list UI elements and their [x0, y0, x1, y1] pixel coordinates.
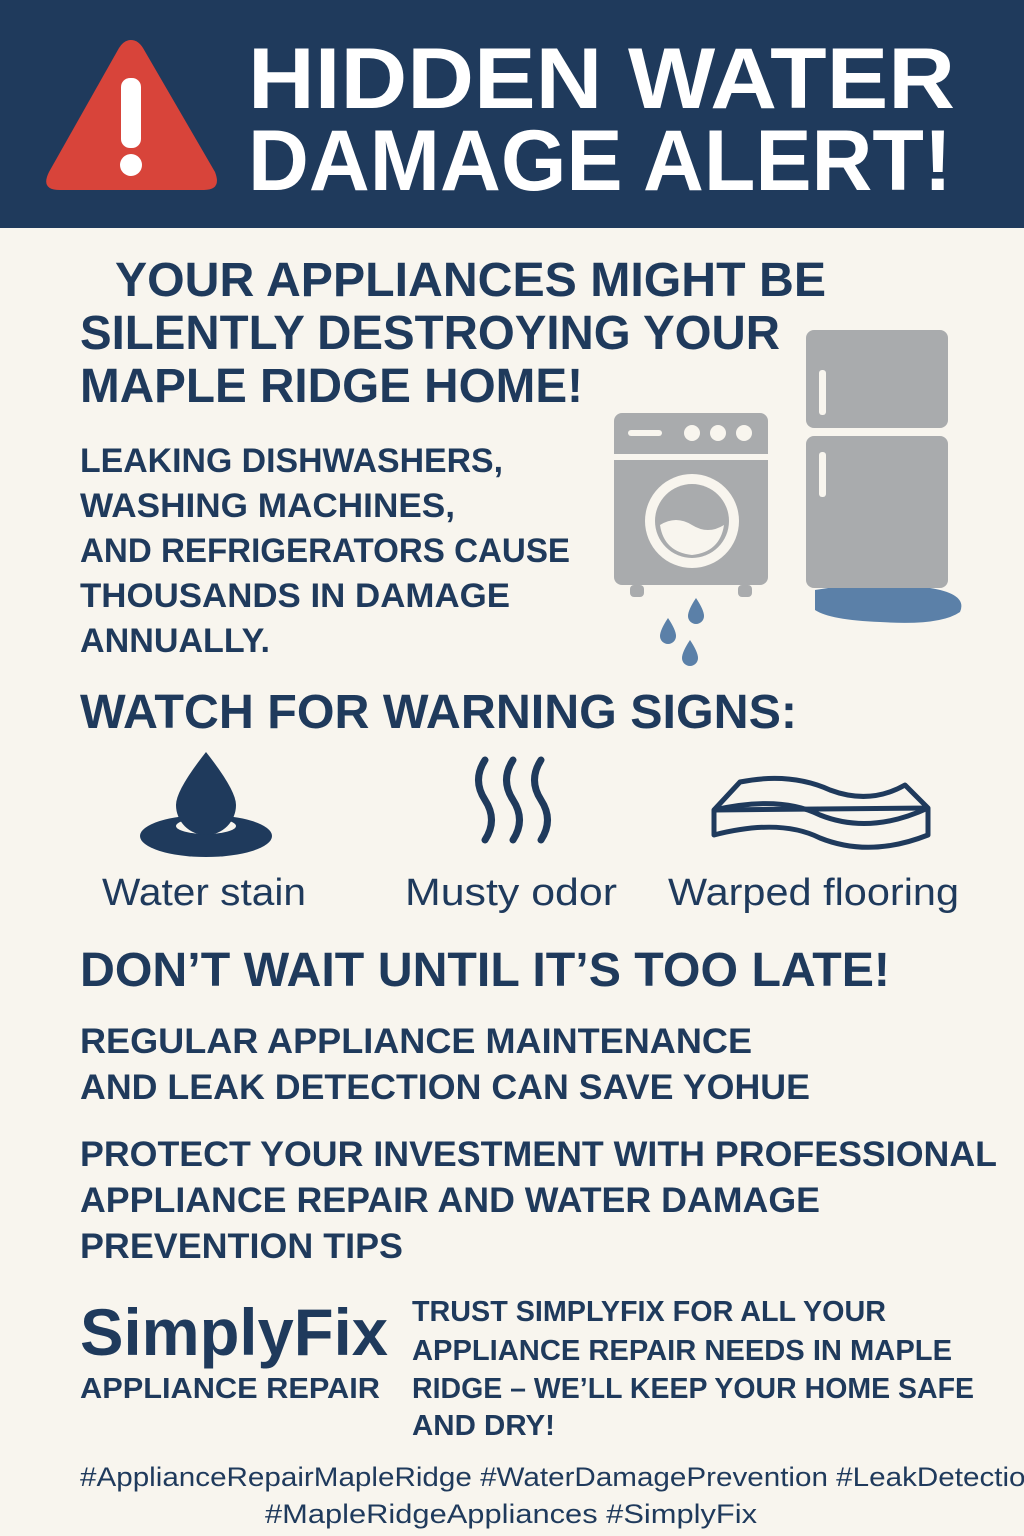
subtitle heading — [80, 254, 826, 413]
title: HIDDEN WATER — [248, 31, 955, 127]
title — [248, 31, 955, 209]
text: trust callout: APPLIANCE REPAIR NEEDS IN MAPLE — [412, 1335, 952, 1367]
warning sign: water stain: Water stain — [102, 872, 306, 914]
intro text: AND REFRIGERATORS CAUSE — [80, 532, 570, 570]
icon: warning triangle — [46, 40, 217, 190]
hashtags: #ApplianceRepairMapleRidge #WaterDamagePrevention #LeakDetection — [80, 1462, 1024, 1492]
heading: warning signs: WATCH FOR WARNING SIGNS: — [80, 686, 797, 739]
text: protect investment — [80, 1135, 997, 1266]
text: protect investment: PREVENTION TIPS — [80, 1227, 403, 1266]
subtitle heading: MAPLE RIDGE HOME! — [80, 360, 583, 413]
text: maintenance: REGULAR APPLIANCE MAINTENANCE — [80, 1022, 752, 1061]
text: maintenance: AND LEAK DETECTION CAN SAVE YOHUE — [80, 1068, 810, 1107]
warning sign: musty odor — [405, 760, 617, 914]
subtitle heading: YOUR APPLIANCES MIGHT BE — [115, 254, 826, 307]
icon: water drops — [660, 598, 704, 666]
intro text — [80, 442, 570, 660]
text: maintenance — [80, 1022, 810, 1107]
warning sign: musty odor: Musty odor — [405, 872, 617, 914]
logo: SimplyFix: SimplyFix — [80, 1295, 388, 1369]
text: trust callout: AND DRY! — [412, 1410, 555, 1442]
text: trust callout — [412, 1296, 974, 1442]
heading: don't wait: DON’T WAIT UNTIL IT’S TOO LATE! — [80, 944, 890, 997]
icon: refrigerator — [806, 330, 961, 623]
hashtags — [80, 1462, 1024, 1529]
subtitle heading: SILENTLY DESTROYING YOUR — [80, 307, 780, 360]
intro text: LEAKING DISHWASHERS, — [80, 442, 503, 480]
logo: SimplyFix: APPLIANCE REPAIR — [80, 1373, 380, 1405]
intro text: WASHING MACHINES, — [80, 487, 455, 525]
warning sign: warped flooring — [668, 778, 959, 914]
warning sign: water stain — [102, 752, 306, 914]
hashtags: #MapleRidgeAppliances #SimplyFix — [265, 1499, 758, 1529]
text: protect investment: PROTECT YOUR INVESTMENT WITH PROFESSIONAL — [80, 1135, 997, 1174]
intro text: ANNUALLY. — [80, 622, 270, 660]
warning sign: warped flooring: Warped flooring — [668, 872, 959, 914]
text: protect investment: APPLIANCE REPAIR AND WATER DAMAGE — [80, 1181, 820, 1220]
text: trust callout: RIDGE – WE’LL KEEP YOUR HOME SAFE — [412, 1373, 974, 1405]
icon: washing machine — [614, 413, 768, 597]
logo: SimplyFix — [80, 1295, 388, 1405]
illustration: leaking appliances — [614, 330, 961, 666]
title: DAMAGE ALERT! — [248, 113, 952, 209]
header banner — [0, 0, 1024, 228]
intro text: THOUSANDS IN DAMAGE — [80, 577, 510, 615]
text: trust callout: TRUST SIMPLYFIX FOR ALL YOUR — [412, 1296, 886, 1328]
